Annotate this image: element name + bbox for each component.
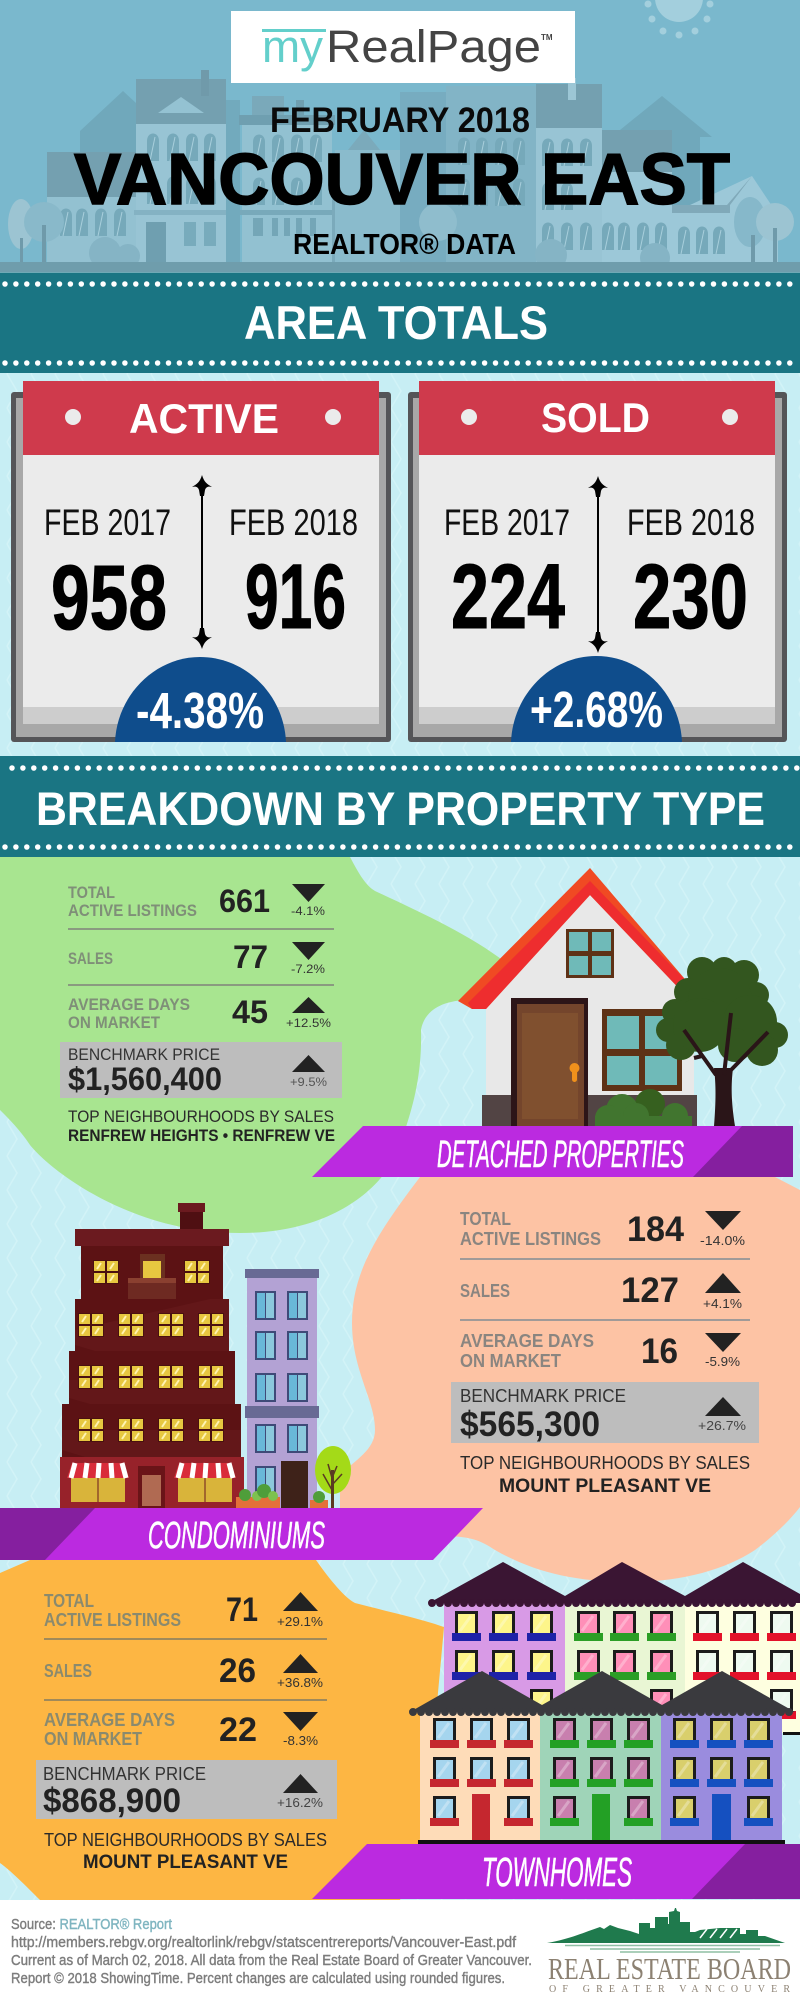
value: 26: 26 (219, 1652, 256, 1690)
top neighbourhoods: RENFREW HEIGHTS • RENFREW VE (68, 1126, 335, 1145)
value: 184: 184 (627, 1210, 685, 1249)
banner: townhomes (312, 1844, 800, 1899)
number: 916: 916 (245, 546, 346, 648)
change: +4.1% (703, 1273, 742, 1311)
illustration: townhomes (410, 1562, 800, 1844)
blob: townhomes background (0, 1560, 444, 1900)
benchmark price box: BENCHMARK PRICE (43, 1764, 206, 1784)
change: -5.9%: -5.9% (705, 1354, 740, 1369)
change: +36.8% (277, 1654, 323, 1690)
benchmark price box: BENCHMARK PRICE (460, 1386, 626, 1406)
panel: sold card (408, 381, 787, 742)
top neighbourhoods: TOP NEIGHBOURHOODS BY SALES (460, 1453, 750, 1473)
change: -14.0%: -14.0% (700, 1233, 745, 1248)
label: sales: SALES (44, 1661, 92, 1681)
banner: detached properties (312, 1126, 793, 1177)
benchmark price box: $1,560,400 (68, 1061, 222, 1097)
value: 77: 77 (233, 939, 268, 975)
tree (656, 957, 788, 1126)
label: total active listings (44, 1591, 181, 1630)
band: area totals (0, 272, 800, 373)
label: total active listings: TOTAL (460, 1209, 511, 1229)
number: 224: 224 (451, 546, 565, 648)
change: +4.1%: +4.1% (703, 1296, 742, 1311)
label: sales: SALES (460, 1281, 510, 1301)
panel: active card (11, 381, 391, 742)
value: 661: 661 (219, 883, 270, 919)
benchmark price box: $565,300 (460, 1405, 600, 1444)
top neighbourhoods (460, 1453, 750, 1497)
label: average days on market: AVERAGE DAYS (44, 1710, 175, 1730)
top neighbourhoods (44, 1830, 327, 1873)
back row (429, 1562, 800, 1735)
change: -5.9% (705, 1333, 741, 1369)
label: Feb 2018: FEB 2018 (627, 502, 755, 543)
icon: sun (644, 0, 714, 38)
label: total active listings: ACTIVE LISTINGS (44, 1610, 181, 1630)
change: +36.8%: +36.8% (277, 1675, 323, 1690)
badge: change: -4.38% (136, 682, 264, 739)
page background with zigzag pattern (0, 373, 800, 1900)
panel: townhomes stats (36, 1591, 337, 1873)
source text: Current as of March 02, 2018. All data from the Real Estate Board of Greater Vancouver. (11, 1952, 532, 1969)
value: 22: 22 (219, 1711, 257, 1749)
number: 230: 230 (633, 546, 748, 648)
badge: change (511, 656, 682, 742)
label: average days on market: AVERAGE DAYS (68, 995, 190, 1014)
logo: myRealPage: my (262, 21, 323, 72)
label: total active listings: ACTIVE LISTINGS (460, 1229, 601, 1249)
label: total active listings: TOTAL (68, 883, 115, 902)
label: Feb 2017: FEB 2017 (44, 502, 171, 543)
divider ornament (192, 475, 212, 649)
trees (8, 197, 794, 273)
change: +29.1%: +29.1% (277, 1614, 323, 1629)
logo: Real Estate Board of Greater Vancouver: OF GREATER VANCOUVER (549, 1984, 790, 1995)
source text: http://members.rebgv.org/realtorlink/rebgv/statscentrereports/Vancouver-East.pdf (11, 1934, 517, 1951)
label: average days on market: ON MARKET (68, 1013, 161, 1032)
front row (410, 1671, 795, 1844)
benchmark price box: +26.7% (698, 1418, 746, 1433)
label: total active listings (460, 1209, 601, 1249)
blob: condominiums background (340, 1177, 800, 1582)
heading: active: ACTIVE (129, 395, 279, 442)
panel: detached stats (60, 883, 342, 1145)
change: +12.5%: +12.5% (286, 1016, 331, 1030)
top neighbourhoods (68, 1107, 335, 1145)
panel: condominium stats (451, 1209, 759, 1497)
title: February 2018: FEBRUARY 2018 (270, 101, 530, 140)
banner: condominiums (0, 1508, 483, 1560)
benchmark price box: $868,900 (43, 1782, 181, 1820)
label: total active listings: TOTAL (44, 1591, 94, 1611)
label: total active listings (68, 883, 197, 920)
title: Vancouver East: VANCOUVER EAST (74, 140, 730, 220)
top neighbourhoods: MOUNT PLEASANT VE (83, 1852, 288, 1873)
label: total active listings: ACTIVE LISTINGS (68, 901, 197, 920)
subtitle: Realtor data: REALTOR® DATA (293, 229, 516, 261)
badge: change (115, 657, 286, 742)
header scene: skyline illustration (0, 0, 800, 273)
logo: Real Estate Board of Greater Vancouver (547, 1908, 791, 1995)
illustration: condominium building (60, 1203, 351, 1508)
label: Feb 2017: FEB 2017 (444, 502, 570, 543)
label: average days on market (44, 1710, 175, 1749)
value: 45: 45 (232, 994, 268, 1030)
benchmark price box (60, 1042, 342, 1098)
heading: sold: SOLD (541, 394, 650, 441)
change: -8.3% (283, 1712, 318, 1748)
band: breakdown (0, 756, 800, 857)
logo: myRealPage: RealPage (326, 21, 541, 72)
change: -14.0% (700, 1211, 745, 1248)
illustration: detached house (458, 868, 788, 1131)
divider ornament (588, 476, 608, 653)
change: +12.5% (286, 997, 331, 1030)
change: -7.2%: -7.2% (291, 962, 325, 976)
change: +29.1% (277, 1592, 323, 1629)
benchmark price box (451, 1382, 759, 1444)
label: average days on market (460, 1331, 594, 1371)
label: average days on market (68, 995, 190, 1032)
logo: myRealPage (231, 11, 575, 83)
change: -7.2% (291, 942, 325, 976)
banner: townhomes: TOWNHOMES (482, 1849, 632, 1895)
label: sales: SALES (68, 949, 113, 968)
benchmark price box: BENCHMARK PRICE (68, 1045, 220, 1064)
label: Feb 2018: FEB 2018 (229, 502, 358, 543)
change: -4.1%: -4.1% (291, 904, 325, 918)
top neighbourhoods: TOP NEIGHBOURHOODS BY SALES (44, 1830, 327, 1850)
footer panel (0, 1900, 800, 2000)
number: 958: 958 (51, 547, 167, 649)
label: average days on market: ON MARKET (44, 1729, 142, 1749)
label: average days on market: AVERAGE DAYS (460, 1331, 594, 1351)
source text (11, 1916, 532, 1987)
label: average days on market: ON MARKET (460, 1351, 561, 1371)
benchmark price box (36, 1760, 337, 1820)
top neighbourhoods: TOP NEIGHBOURHOODS BY SALES (68, 1107, 334, 1126)
benchmark price box: +9.5% (290, 1075, 327, 1089)
bushes (595, 1089, 692, 1131)
blob: detached background (0, 857, 505, 1233)
value: 71: 71 (226, 1591, 258, 1629)
badge: change: +2.68% (530, 681, 663, 738)
heading: area totals: AREA TOTALS (244, 296, 548, 349)
change: -4.1% (291, 884, 325, 918)
planters and tree (236, 1446, 351, 1508)
source text: Source: REALTOR® Report (11, 1916, 173, 1933)
source text: Report © 2018 ShowingTime. Percent changes are calculated using rounded figures. (11, 1970, 505, 1987)
value: 16: 16 (641, 1332, 678, 1371)
benchmark price box: +16.2% (277, 1795, 323, 1810)
logo: myRealPage: TM (541, 33, 553, 42)
banner: condominiums: CONDOMINIUMS (148, 1515, 325, 1557)
value: 127: 127 (621, 1271, 679, 1310)
top neighbourhoods: MOUNT PLEASANT VE (499, 1476, 711, 1497)
change: -8.3%: -8.3% (283, 1733, 318, 1748)
